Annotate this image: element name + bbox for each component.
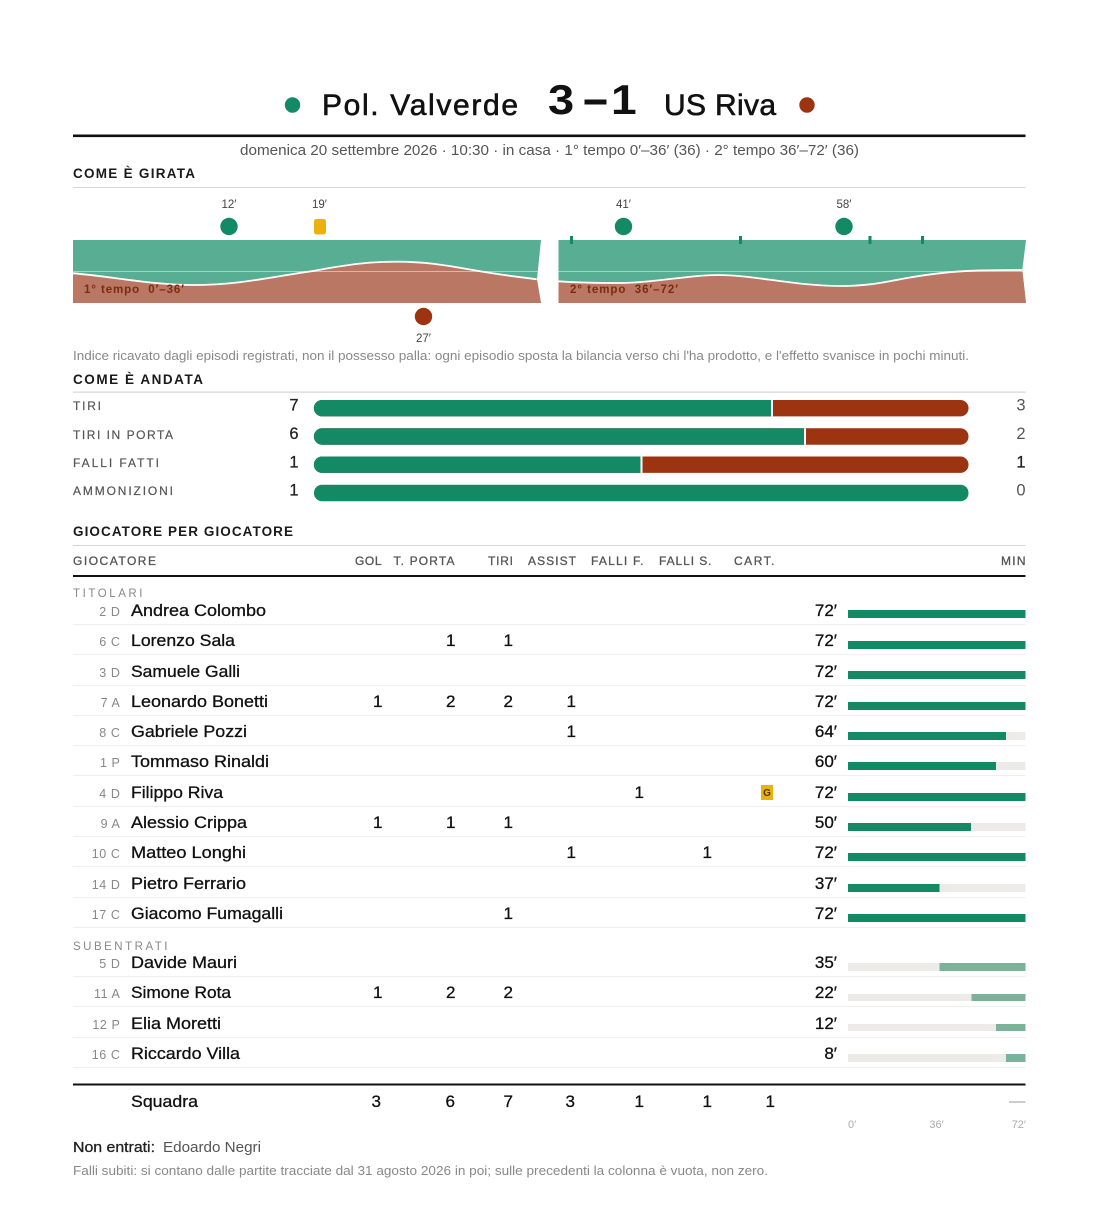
group label: titolari: TITOLARI [73,588,142,600]
unused players: Edoardo Negri [163,1140,261,1156]
player: Lorenzo Sala: 1 [446,631,456,650]
second half area [558,240,1026,303]
player: Alessio Crippa: 1 [504,813,513,832]
player: Tommaso Rinaldi: Tommaso Rinaldi [131,752,269,771]
stat: ammonizioni: 0 [1016,482,1026,500]
minutes axis [848,1119,1026,1131]
footnote: Falli subiti: si contano dalle partite tracciate dal 31 agosto 2026 in poi; sulle precedenti la colonna è vuota, non zero. [73,1164,768,1178]
player: Gabriele Pozzi [73,722,1026,746]
event: goal 41: 41′ [616,199,631,211]
player: Matteo Longhi: 72′ [815,843,837,862]
stat: tiri: 3 [1016,396,1026,414]
event: away goal 27 [415,308,432,345]
table header: FALLI F. [591,554,644,568]
team totals [131,1092,1026,1111]
player: Pietro Ferrario: 37′ [815,874,837,893]
stat: tiri in porta: 6 [289,425,298,443]
player: Andrea Colombo: 2 D [99,605,120,619]
player: Alessio Crippa: Alessio Crippa [131,813,248,832]
event: yellow card 19: 19′ [312,199,327,211]
shot ticks [570,236,924,244]
table header: T. PORTA [394,554,454,568]
stat: tiri: TIRI [73,399,101,413]
table header: TIRI [488,554,513,568]
event: goal 41 [615,199,632,235]
player: Gabriele Pozzi: 1 [567,722,576,741]
player: Alessio Crippa: 50′ [815,813,837,832]
team totals: 1 [703,1092,712,1111]
player: Gabriele Pozzi: 8 C [99,726,120,740]
stat: ammonizioni [73,482,1026,501]
group label: subentrati: SUBENTRATI [73,941,168,953]
table header: FALLI S. [659,554,712,568]
player: Tommaso Rinaldi [73,752,1026,776]
score [548,77,637,124]
team totals: 3 [566,1092,575,1111]
away team name: US Riva [664,89,776,122]
player: Leonardo Bonetti: 1 [373,692,382,711]
team totals: 1 [766,1092,775,1111]
first half area [73,240,541,303]
player: Riccardo Villa [73,1044,1026,1068]
player: Giacomo Fumagalli: 1 [504,904,513,923]
first half label: 1° tempo 0′–36′ [84,284,184,296]
event: goal 12 [220,199,238,235]
team totals: 7 [504,1092,513,1111]
stat: falli fatti: 1 [289,454,298,472]
stat: ammonizioni: 1 [289,482,298,500]
chart note: Indice ricavato dagli episodi registrati, non il possesso palla: ogni episodio sposta la bilancia verso chi l'ha prodotto, e l'effetto svanisce in pochi minuti. [73,349,969,363]
stat: tiri in porta [73,425,1026,445]
player: Matteo Longhi: 1 [703,843,712,862]
player: Gabriele Pozzi: Gabriele Pozzi [131,722,247,741]
player: Giacomo Fumagalli [73,904,1026,928]
player: Davide Mauri: Davide Mauri [131,953,237,972]
team totals: 1 [635,1092,644,1111]
table header: ASSIST [528,554,577,568]
player: Pietro Ferrario [73,874,1026,898]
player: Tommaso Rinaldi: 1 P [100,756,120,770]
table header: CART. [734,554,774,568]
player: Simone Rota: 11 A [94,987,121,1001]
player: Simone Rota: 22′ [815,983,837,1002]
minutes axis: 72′ [1012,1119,1026,1131]
team totals: 3 [372,1092,381,1111]
team totals: 6 [446,1092,455,1111]
player: Elia Moretti: 12 P [92,1018,120,1032]
table header [73,554,1026,568]
home team name: Pol. Valverde [322,89,518,122]
table header: GIOCATORE [73,554,156,568]
match header [285,77,815,124]
player: Simone Rota: Simone Rota [131,983,232,1002]
stat: tiri in porta: TIRI IN PORTA [73,428,173,442]
player: Leonardo Bonetti: 72′ [815,692,837,711]
player: Lorenzo Sala [73,631,1026,655]
player: Giacomo Fumagalli: 17 C [92,908,120,922]
player: Riccardo Villa: 8′ [824,1044,837,1063]
player: Giacomo Fumagalli: Giacomo Fumagalli [131,904,283,923]
momentum chart [73,199,1026,345]
event: goal 58 [835,199,853,235]
stat: tiri in porta: 2 [1016,425,1026,443]
player: Alessio Crippa: 1 [373,813,382,832]
player: Leonardo Bonetti: Leonardo Bonetti [131,692,268,711]
player: Simone Rota [73,983,1026,1007]
player: Andrea Colombo: Andrea Colombo [131,601,266,620]
player: Alessio Crippa: 9 A [101,817,121,831]
unused players [73,1140,261,1156]
icon: away team dot [799,97,815,113]
player: Samuele Galli: 72′ [815,662,837,681]
player: Alessio Crippa: 1 [446,813,456,832]
stat: tiri [73,396,1026,416]
player: Matteo Longhi: Matteo Longhi [131,843,246,862]
player: Samuele Galli [73,662,1026,686]
player: Riccardo Villa: Riccardo Villa [131,1044,241,1063]
player: Riccardo Villa: 16 C [92,1048,120,1062]
event: goal 58: 58′ [837,199,851,211]
player: Leonardo Bonetti: 7 A [101,696,121,710]
player: Andrea Colombo: 72′ [815,601,837,620]
player: Filippo Riva [73,783,1026,807]
heading: giocatore per giocatore: GIOCATORE PER GIOCATORE [73,524,293,539]
player: Elia Moretti: 12′ [815,1014,837,1033]
player: Matteo Longhi [73,843,1026,867]
stat: ammonizioni: AMMONIZIONI [73,484,173,498]
player: Leonardo Bonetti [73,692,1026,716]
player: Simone Rota: 2 [504,983,513,1002]
player: Filippo Riva: G [763,788,771,799]
minutes axis: 0′ [848,1119,856,1131]
player: Andrea Colombo [73,601,1026,625]
player: Lorenzo Sala: Lorenzo Sala [131,631,236,650]
player: Simone Rota: 1 [373,983,382,1002]
stat: falli fatti: 1 [1016,454,1026,472]
player: Leonardo Bonetti: 1 [567,692,576,711]
player: Samuele Galli: Samuele Galli [131,662,240,681]
player: Lorenzo Sala: 72′ [815,631,837,650]
player: Pietro Ferrario: 14 D [92,878,120,892]
player: Elia Moretti: Elia Moretti [131,1014,221,1033]
stat: falli fatti: FALLI FATTI [73,456,159,470]
player: Filippo Riva: 72′ [815,783,837,802]
player: Davide Mauri [73,953,1026,977]
player: Simone Rota: 2 [446,983,456,1002]
stat: tiri: 7 [289,396,298,414]
event: goal 12: 12′ [222,199,236,211]
stat: falli fatti [73,454,1026,473]
match details: domenica 20 settembre 2026 · 10:30 · in casa · 1° tempo 0′–36′ (36) · 2° tempo 36′–72′ (36) [240,143,859,159]
player: Filippo Riva: Filippo Riva [131,783,224,802]
player: Alessio Crippa [73,813,1026,837]
score: 3 [548,77,574,123]
player: Lorenzo Sala: 1 [504,631,513,650]
icon: home team dot [285,97,300,113]
player: Tommaso Rinaldi: 60′ [815,752,837,771]
team totals: Squadra [131,1092,199,1111]
player: Samuele Galli: 3 D [99,666,120,680]
table header: GOL [355,554,382,568]
player: Davide Mauri: 5 D [99,957,120,971]
player: Leonardo Bonetti: 2 [504,692,513,711]
event: away goal 27: 27′ [416,333,431,345]
player: Gabriele Pozzi: 64′ [815,722,837,741]
table header: MIN [1001,554,1026,568]
heading: come è andata: COME È ANDATA [73,372,203,387]
player: Giacomo Fumagalli: 72′ [815,904,837,923]
player: Matteo Longhi: 1 [567,843,576,862]
player: Matteo Longhi: 10 C [92,847,120,861]
score: 1 [611,77,637,124]
heading: come è girata: COME È GIRATA [73,166,195,181]
minutes axis: 36′ [929,1119,944,1131]
unused players: Non entrati: [73,1140,155,1156]
player: Pietro Ferrario: Pietro Ferrario [131,874,246,893]
event: yellow card 19 [312,199,327,234]
player: Leonardo Bonetti: 2 [446,692,456,711]
second half label: 2° tempo 36′–72′ [570,284,678,296]
player: Filippo Riva: 4 D [99,787,120,801]
player: Davide Mauri: 35′ [815,953,837,972]
player: Filippo Riva: 1 [635,783,644,802]
player: Elia Moretti [73,1014,1026,1038]
player: Lorenzo Sala: 6 C [99,635,120,649]
